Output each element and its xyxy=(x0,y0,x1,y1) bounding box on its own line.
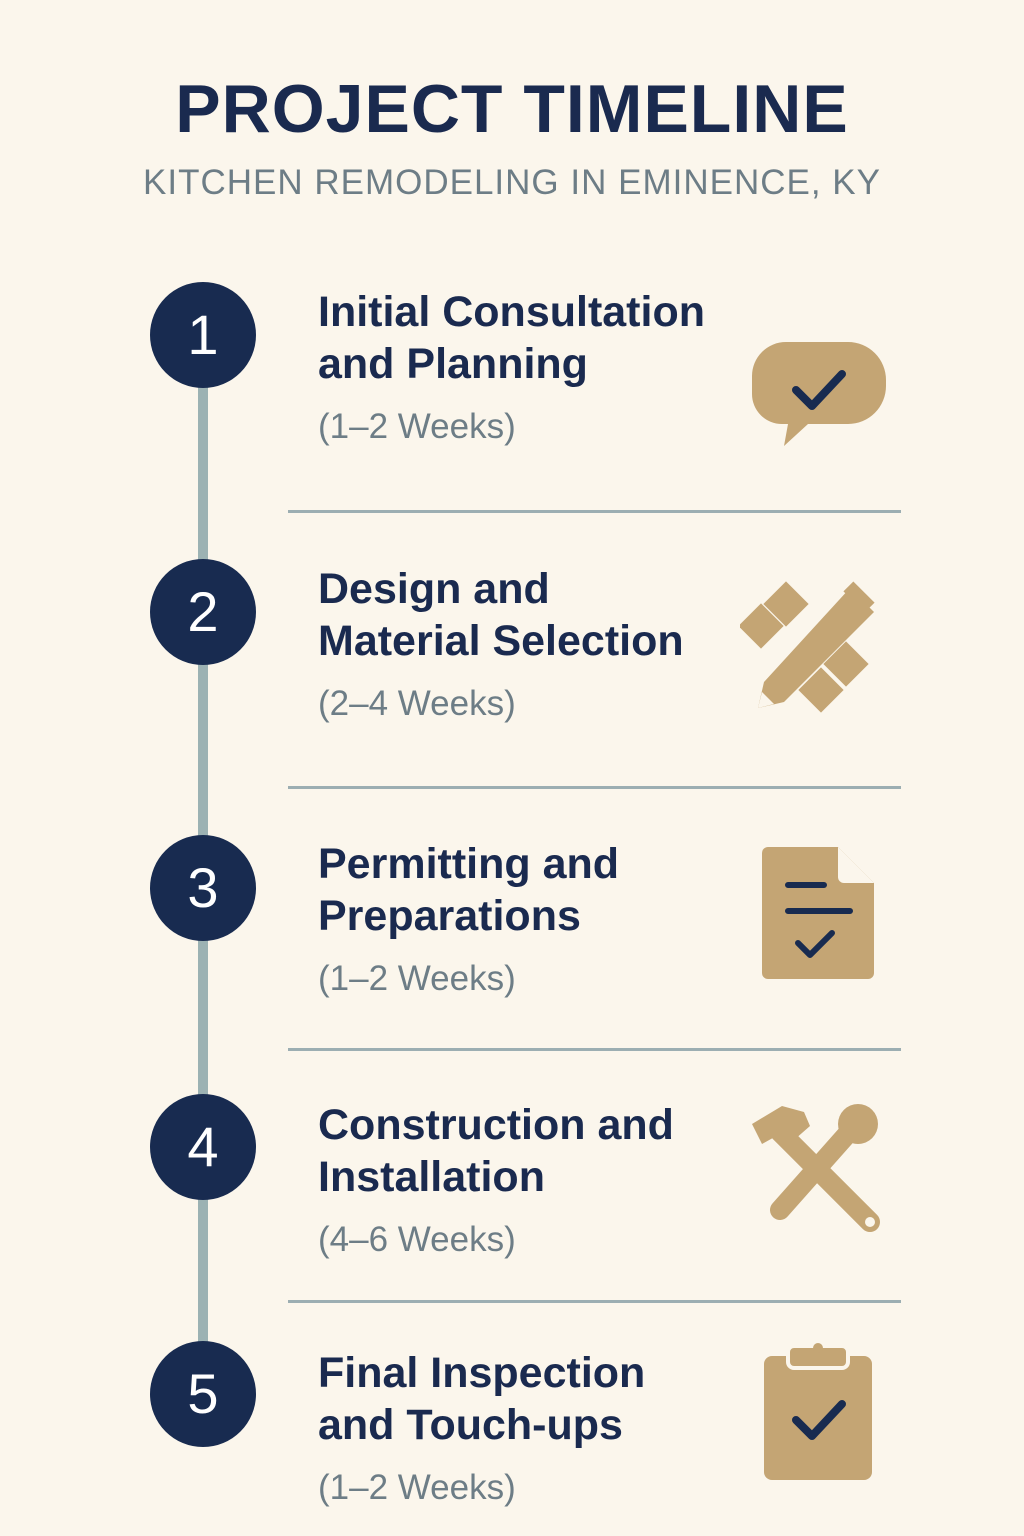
icon: clipboard xyxy=(764,1343,872,1480)
circle 2 xyxy=(150,559,256,665)
step 4 text xyxy=(318,1101,674,1259)
step 1 text xyxy=(318,288,705,446)
title: PROJECT TIMELINE xyxy=(175,71,849,147)
circle 4 xyxy=(150,1094,256,1200)
circle 5: 5 xyxy=(187,1362,219,1425)
step 3 text: (1–2 Weeks) xyxy=(318,959,516,998)
step 1 text: Initial Consultation xyxy=(318,288,705,336)
circle 1 xyxy=(150,282,256,388)
circle 4: 4 xyxy=(187,1115,219,1178)
step 4 text: (4–6 Weeks) xyxy=(318,1220,516,1259)
step 5 text xyxy=(318,1349,645,1507)
subtitle: KITCHEN REMODELING IN EMINENCE, KY xyxy=(143,163,881,202)
icon: document xyxy=(762,847,874,979)
step 2 text: (2–4 Weeks) xyxy=(318,684,516,723)
circle 3 xyxy=(150,835,256,941)
icon: chat check xyxy=(752,342,886,446)
step 3 text xyxy=(318,840,619,998)
icon: ruler pencil xyxy=(740,582,874,712)
step 1 text: and Planning xyxy=(318,340,588,388)
timeline line xyxy=(198,335,208,1395)
step 2 text: Design and xyxy=(318,565,550,613)
step 2 text xyxy=(318,565,684,723)
step 3 text: Preparations xyxy=(318,892,581,940)
step 5 text: and Touch-ups xyxy=(318,1401,623,1449)
circle 2: 2 xyxy=(187,580,219,643)
circle 1: 1 xyxy=(187,303,219,366)
circle 3: 3 xyxy=(187,856,219,919)
icon: tools xyxy=(752,1104,880,1232)
step 5 text: Final Inspection xyxy=(318,1349,645,1397)
step 1 text: (1–2 Weeks) xyxy=(318,407,516,446)
step 3 text: Permitting and xyxy=(318,840,619,888)
step 4 text: Construction and xyxy=(318,1101,674,1149)
step 4 text: Installation xyxy=(318,1153,545,1201)
circle 5 xyxy=(150,1341,256,1447)
step 5 text: (1–2 Weeks) xyxy=(318,1468,516,1507)
step 2 text: Material Selection xyxy=(318,617,684,665)
